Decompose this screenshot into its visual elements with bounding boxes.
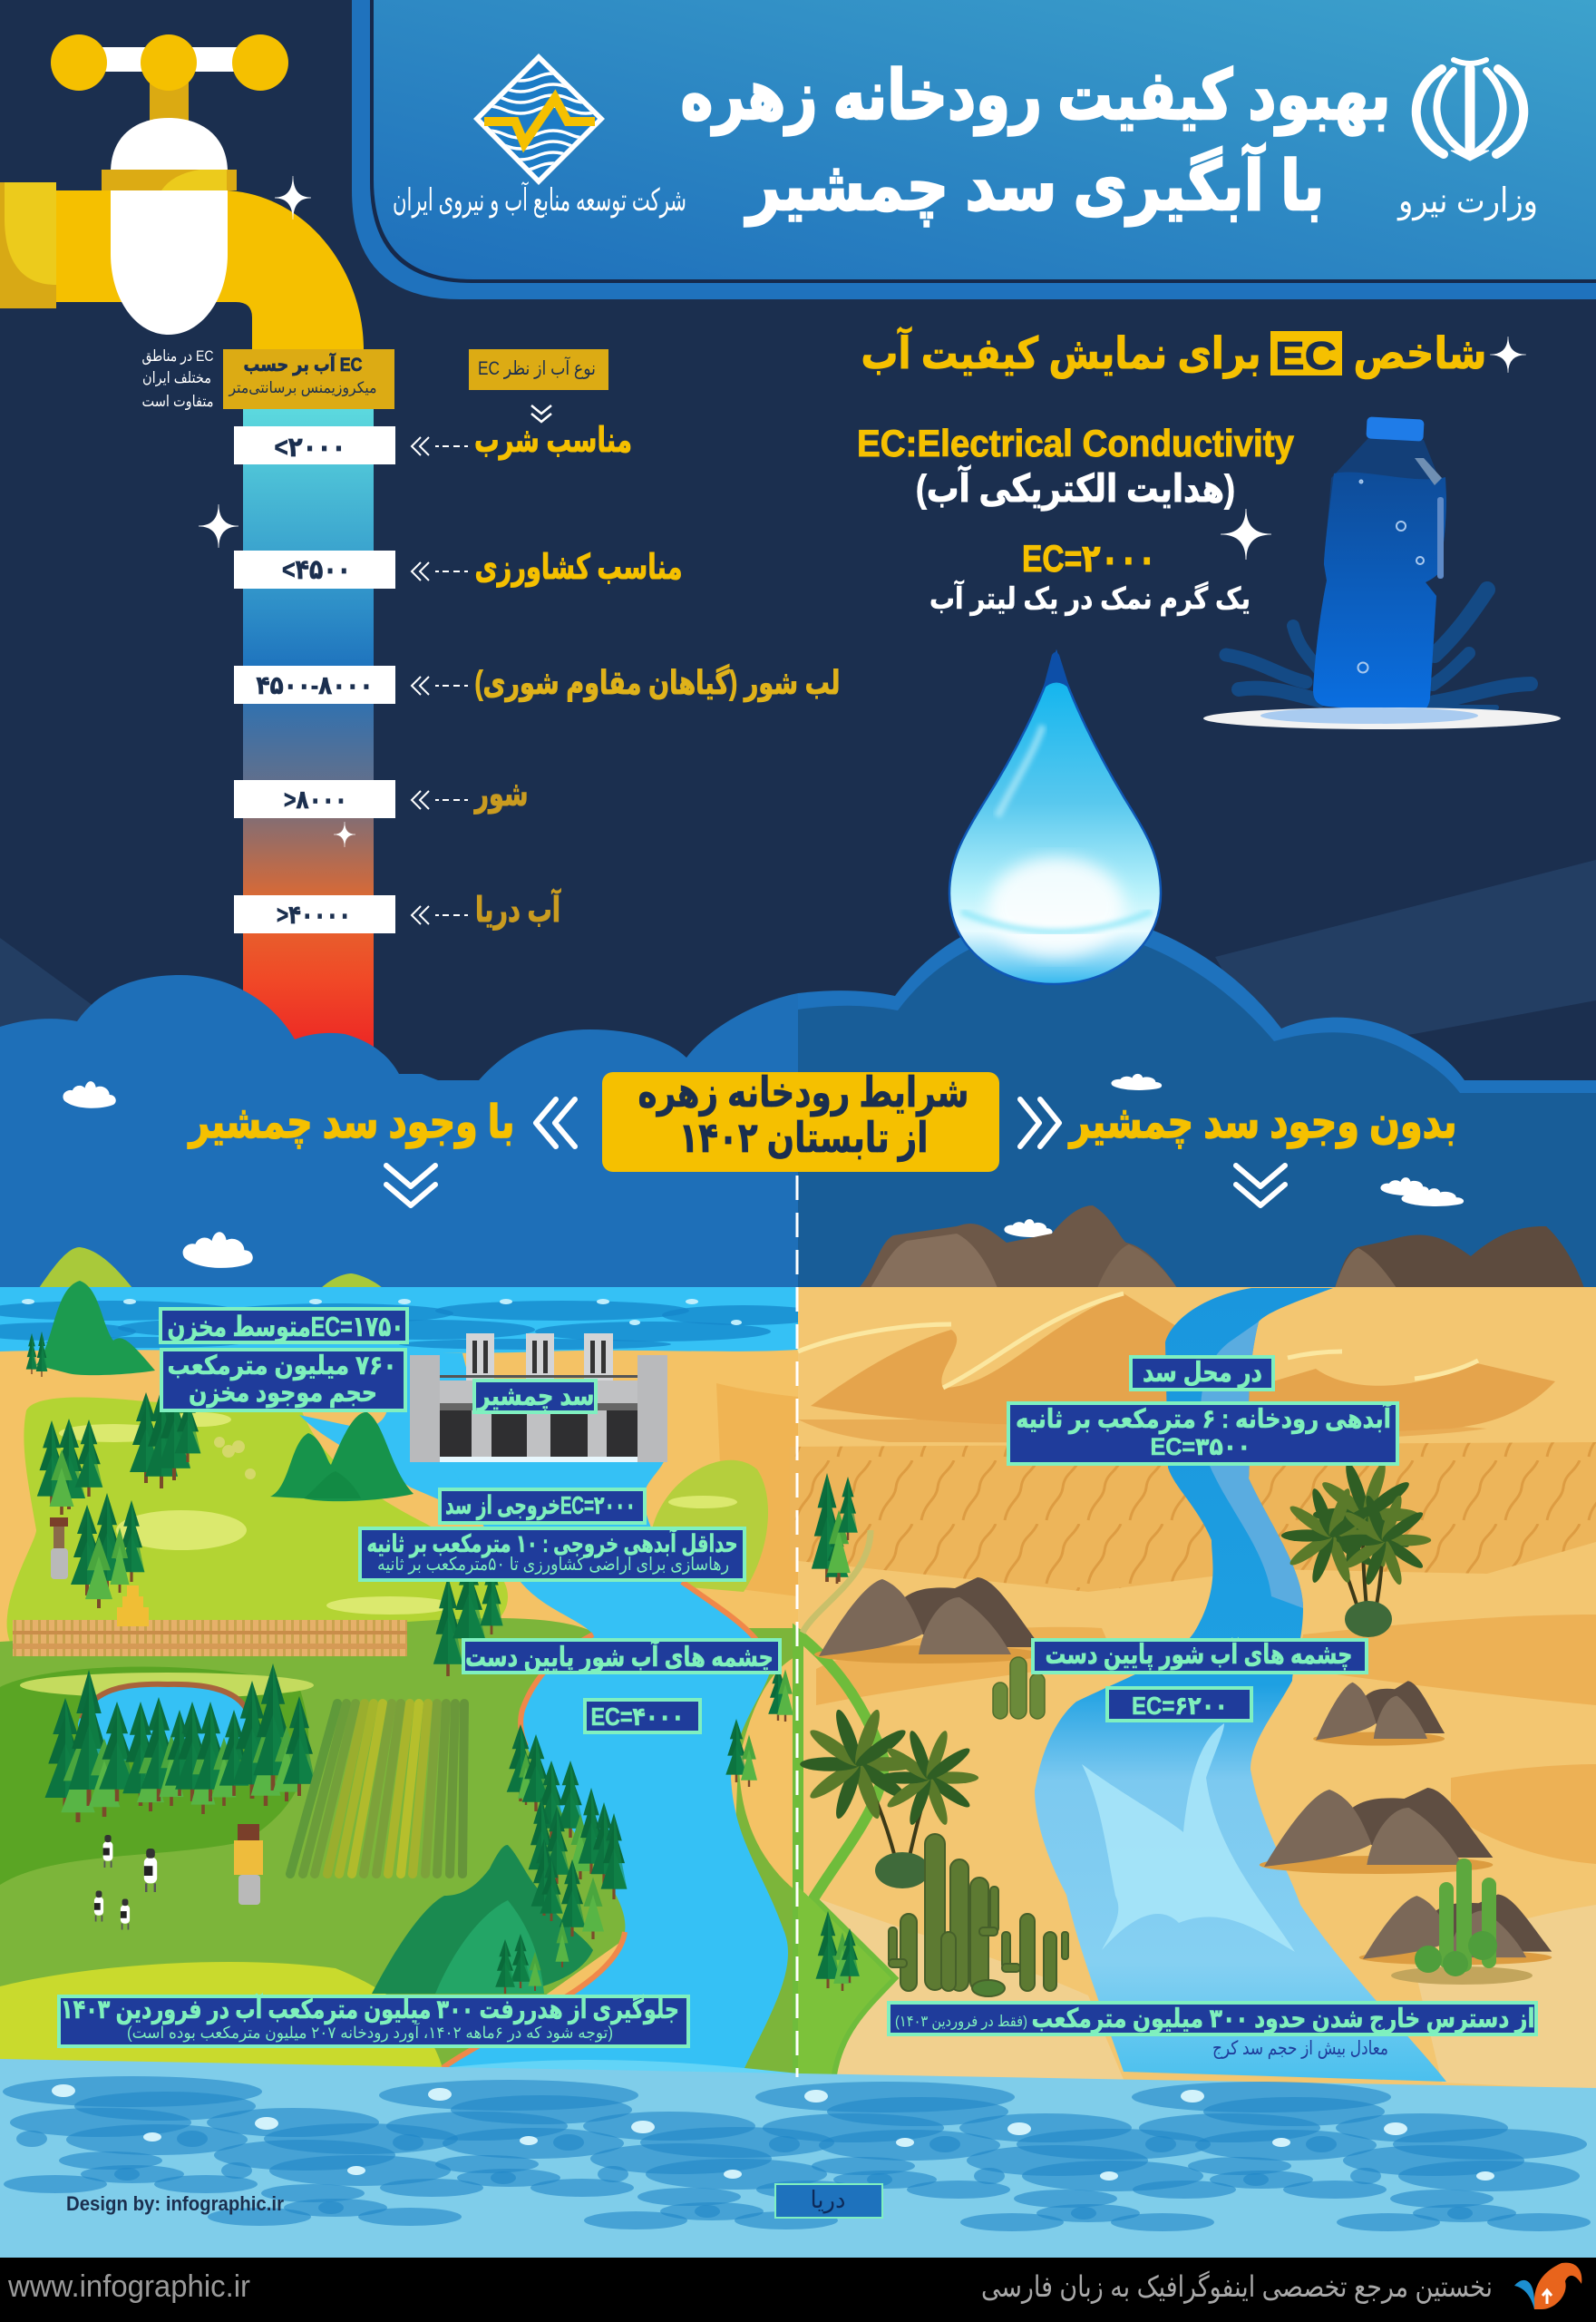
design credit: Design by: infographic.ir [66, 2192, 284, 2215]
fence [13, 1620, 407, 1656]
lower sand bands [816, 1615, 1596, 1864]
footer [0, 2258, 1596, 2322]
heading: without dam: بدون وجود سد چمشیر [1067, 1097, 1456, 1149]
heading: EC index: شاخص [1353, 330, 1487, 379]
green land upper [7, 1398, 508, 1642]
deep green patch [0, 1667, 308, 1885]
type header box [469, 349, 608, 390]
right land green [725, 1628, 798, 2077]
pale sand [798, 1891, 1596, 2090]
river [443, 1451, 788, 2068]
row: drinkable: <۲۰۰۰ [274, 433, 346, 463]
icon: company logo diamond [472, 54, 605, 185]
note: equals Karaj dam: معادل بیش از حجم سد کرج [1212, 2038, 1388, 2060]
icon: clouds [63, 1074, 1464, 1268]
label: sea [775, 2184, 882, 2218]
note: EC in regions: متفاوت است [141, 393, 214, 410]
label: downstream springs right [1033, 1637, 1367, 1673]
hay stack [117, 1585, 149, 1626]
label: reservoir volume: حجم موجود مخزن [189, 1379, 377, 1408]
mountains [36, 1281, 593, 1994]
background light bands [0, 860, 1596, 1052]
sand strip right of dam [660, 1351, 798, 1596]
icon: ministry emblem [1416, 60, 1523, 161]
header banner [352, 0, 1596, 299]
label: minimum outflow: حداقل آبدهی خروجی : ۱۰ مترمکعب بر ثانیه [366, 1528, 738, 1558]
footer url: www.infographic.ir [7, 2269, 250, 2304]
label: lost water [889, 2003, 1536, 2034]
ministry name: وزارت نیرو [1396, 182, 1538, 221]
row: sea water [234, 888, 561, 933]
label: reservoir average EC: EC=۱۷۵۰متوسط مخزن [168, 1311, 404, 1343]
icon: water bottle [1203, 416, 1561, 729]
row: sea water: آب دریا [475, 888, 561, 930]
wells [50, 1517, 263, 1905]
sea [0, 2059, 1596, 2259]
label: minimum outflow: رهاسازی برای اراضی کشاورزی تا ۵۰مترمکعب بر ثانیه [377, 1555, 729, 1575]
center dashed divider [796, 1176, 798, 2077]
icon: sparkle stars [199, 176, 1526, 847]
dam [410, 1333, 667, 1462]
section heading: conditions box: از تابستان ۱۴۰۲ [678, 1114, 929, 1162]
EC definition text [857, 422, 1295, 617]
ripple dunes [790, 1442, 1596, 1592]
row: drinkable: مناسب شرب [474, 422, 632, 460]
EC definition text: یک گرم نمک در یک لیتر آب [929, 580, 1251, 617]
label: EC 4000: EC=۴۰۰۰ [591, 1702, 684, 1731]
note: EC in regions [141, 347, 214, 410]
label: prevented loss: (توجه شود که در ۶ماهه ۱۴۰۲، آورد رودخانه ۲۰۷ میلیون مترمکعب بوده است) [127, 2022, 613, 2043]
row: sea water: >۴۰۰۰۰ [277, 901, 351, 929]
green path [798, 1530, 891, 2074]
upper dunes [798, 1293, 1555, 1443]
small orchard [214, 1437, 256, 1479]
label: sea: دریا [811, 2186, 845, 2213]
note: EC in regions: مختلف ایران [142, 369, 211, 386]
label: reservoir volume [161, 1350, 405, 1410]
forest trees [26, 1332, 793, 1994]
row: brackish [234, 664, 840, 704]
EC definition text: EC:Electrical Conductivity [857, 422, 1295, 464]
dark green land [0, 1618, 635, 2068]
label: downstream springs right: چشمه های آب شور پایین دست [1045, 1637, 1353, 1671]
EC definition text: EC=۲۰۰۰ [1022, 537, 1156, 580]
label: minimum outflow [360, 1528, 744, 1580]
icon: small down chevrons [531, 405, 551, 422]
river [1035, 1288, 1446, 2082]
footer tagline: نخستین مرجع تخصصی اینفوگرافیک به زبان فارسی [981, 2270, 1493, 2304]
rocks [814, 1577, 1552, 1965]
palm trees [800, 1460, 1431, 1888]
cactus bush [1391, 1859, 1533, 1985]
row: saline [234, 776, 528, 818]
note: EC in regions: EC در مناطق [141, 347, 213, 365]
heading: EC index: EC [1275, 334, 1337, 378]
label: river flow [1008, 1402, 1397, 1464]
label: EC 6200 [1107, 1688, 1251, 1721]
cactus group [889, 1834, 1068, 1996]
section heading: conditions box [602, 1068, 999, 1172]
row: agriculture: مناسب کشاورزی [475, 549, 682, 588]
label: lost water: (فقط در فروردین ۱۴۰۳) [895, 2013, 1027, 2030]
row: saline: >۸۰۰۰ [284, 785, 347, 814]
label: prevented loss [59, 1993, 688, 2046]
upper river wedge [299, 1351, 490, 1506]
label: river flow: EC=۳۵۰۰ [1150, 1433, 1251, 1460]
row: brackish: ۴۵۰۰-۸۰۰۰ [256, 671, 374, 699]
far hills left [39, 1247, 383, 1288]
row: agriculture [234, 549, 682, 589]
pond [20, 1673, 314, 1761]
label: reservoir volume: ۷۶۰ میلیون مترمکعب [168, 1351, 397, 1381]
icon: water drop [949, 652, 1161, 984]
label: downstream springs left: چشمه های آب شور پایین دست [465, 1640, 774, 1673]
icon: faucet [0, 34, 364, 349]
company name: شرکت توسعه منابع آب و نیروی ایران [393, 181, 686, 219]
section heading: conditions box: شرایط رودخانه زهره [638, 1068, 968, 1117]
row: drinkable [234, 422, 632, 464]
title: بهبود کیفیت رودخانه زهره [680, 57, 1391, 136]
reservoir water [0, 1287, 825, 1353]
row: agriculture: <۴۵۰۰ [282, 555, 351, 585]
label: at dam site: در محل سد [1143, 1358, 1262, 1388]
row: brackish: لب شور (گیاهان مقاوم شوری) [475, 664, 840, 702]
arrows: side chevrons [536, 1099, 1059, 1146]
EC scale rows [234, 422, 840, 933]
title: با آبگیری سد چمشیر [744, 143, 1324, 227]
heading: with dam: با وجود سد چمشیر [187, 1097, 515, 1149]
heading: EC index: برای نمایش کیفیت آب [861, 327, 1260, 379]
small cactus [993, 1657, 1045, 1719]
trees beside path [812, 1473, 860, 1991]
arrows: down chevrons [386, 1166, 1285, 1205]
scale header box: میکروزیمنس برسانتی‌متر [229, 379, 377, 396]
label: river flow: آبدهی رودخانه : ۶ مترمکعب بر ثانیه [1016, 1402, 1392, 1434]
icon: footer logo [1514, 2263, 1581, 2309]
label: lost water: از دسترس خارج شدن حدود ۳۰۰ میلیون مترمکعب [1032, 2005, 1534, 2034]
scene: with dam (left) [0, 1281, 825, 2081]
label: EC 6200: EC=۶۲۰۰ [1132, 1692, 1228, 1720]
row: saline: شور [473, 776, 528, 814]
EC definition text: (هدایت الکتریکی آب) [916, 465, 1235, 512]
far mountains right [859, 1205, 1584, 1288]
scene: without dam (right) [790, 1287, 1596, 2090]
scale header box [223, 349, 394, 409]
crop field [290, 1703, 464, 1874]
scale header box: EC آب بر حسب [243, 353, 363, 376]
label: dam name: سد چمشیر [476, 1381, 595, 1412]
scale column gradient [243, 409, 374, 1062]
title [680, 57, 1391, 227]
clouds band: sky shape [0, 912, 1596, 1288]
yellow green patch [0, 1962, 443, 2068]
type header box: نوع آب از نظر EC [478, 356, 596, 379]
heading: EC index [861, 327, 1487, 379]
cows [94, 1835, 157, 1930]
label: prevented loss: جلوگیری از هدررفت ۳۰۰ میلیون مترمکعب آب در فروردین ۱۴۰۳ [61, 1993, 679, 2024]
label: dam outflow EC: EC=۲۰۰۰خروجی از سد [445, 1491, 636, 1520]
